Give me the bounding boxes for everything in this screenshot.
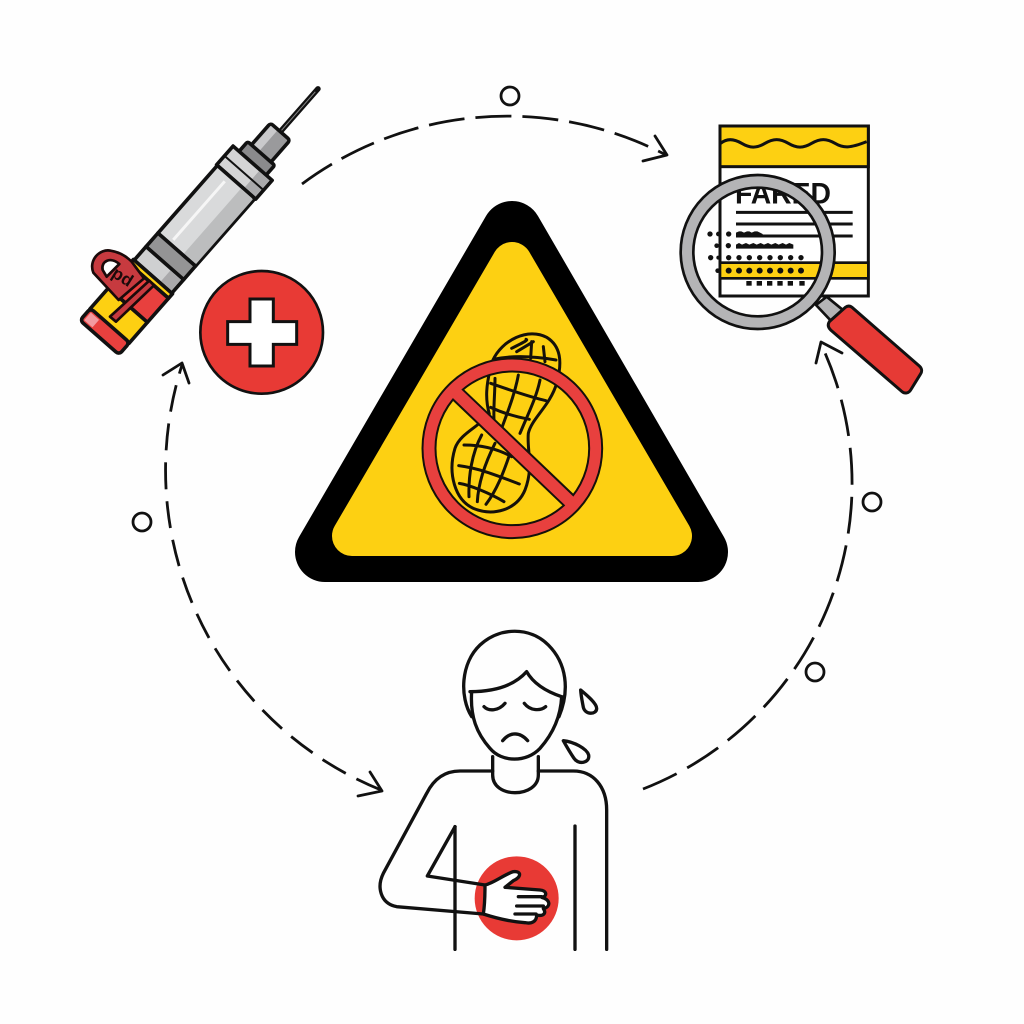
- warning triangle with crossed-out peanut: [325, 231, 698, 552]
- person with stomach pain: [380, 631, 607, 949]
- dot: left: [133, 513, 151, 531]
- label sheet: [720, 126, 868, 296]
- hand: [483, 872, 549, 923]
- tag strip: [110, 281, 154, 322]
- white cross: [228, 299, 297, 366]
- icon: prohibition sign: [429, 365, 596, 532]
- icon: peanut: [452, 334, 560, 512]
- dot: right upper: [863, 493, 881, 511]
- label heading: FARED: [735, 177, 831, 210]
- triangle: black border: [325, 231, 698, 552]
- triangle: yellow field: [352, 262, 672, 536]
- label header: [720, 126, 868, 167]
- highlight band: [720, 263, 868, 278]
- magnifier ring: [687, 181, 828, 323]
- dot: top: [501, 87, 519, 105]
- base: red section: [108, 264, 169, 322]
- arrow: right arc to label: [643, 342, 852, 789]
- label lines: [736, 212, 853, 236]
- tag hole: [102, 260, 119, 277]
- magnifier neck: [816, 297, 845, 323]
- collar: [217, 146, 272, 199]
- tag body: [92, 250, 144, 300]
- arrow: top arc to label: [302, 116, 667, 184]
- arrow: left arc to person and injector: [163, 363, 382, 796]
- food label under magnifier: [707, 126, 868, 296]
- neck: [493, 757, 538, 793]
- pain spot: [475, 856, 559, 940]
- ingredient rows: [707, 231, 805, 286]
- base: red cap: [80, 308, 130, 355]
- barrel: [158, 165, 255, 266]
- magnifier handle: [828, 306, 922, 393]
- auto-injector: [80, 72, 337, 355]
- base: yellow section: [90, 288, 147, 343]
- red circle: [200, 271, 323, 394]
- fingers: [515, 897, 543, 914]
- torso and arm: [380, 771, 607, 949]
- safety tag: [92, 250, 154, 322]
- grey bands: [134, 233, 196, 293]
- cycle: dashed arrows and dots: [133, 87, 881, 796]
- needle: [279, 89, 318, 133]
- sweat drops: [581, 690, 597, 713]
- dot: right lower: [806, 663, 824, 681]
- tag text: pd: [109, 263, 137, 291]
- base: yellow stripe: [129, 259, 172, 298]
- magnifying glass: [687, 181, 922, 393]
- medical cross badge: [200, 271, 323, 394]
- needle hub: [238, 120, 294, 176]
- head: [464, 631, 565, 759]
